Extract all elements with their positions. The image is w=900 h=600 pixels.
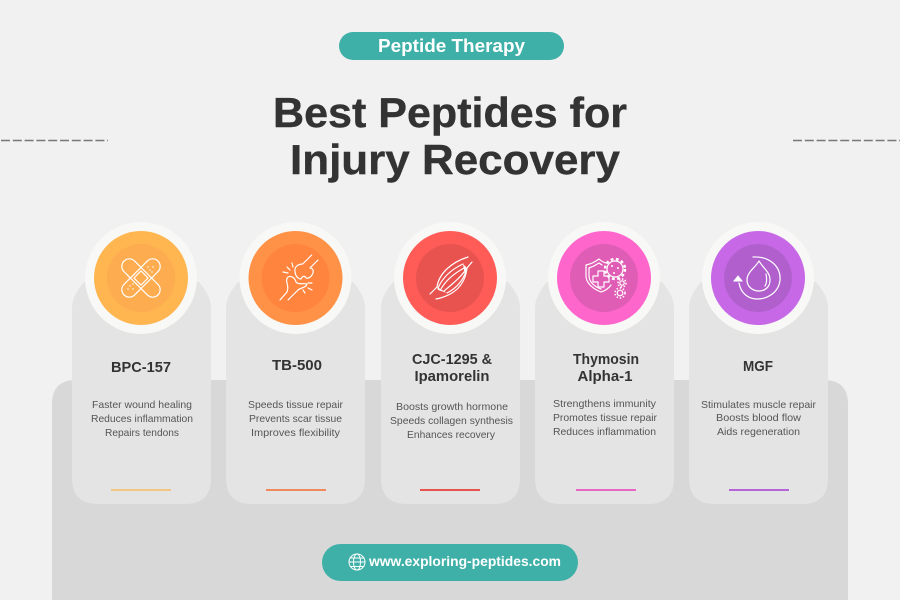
benefits: TB-500: Improves flexibility	[251, 427, 341, 439]
heading: CJC-1295 & Ipamorelin	[412, 351, 492, 385]
header pill: Peptide Therapy	[339, 32, 564, 60]
heading: CJC-1295 & Ipamorelin: CJC-1295 &	[412, 351, 492, 368]
heading: Thymosin Alpha-1	[573, 351, 639, 385]
benefits: TB-500: Speeds tissue repair	[248, 399, 343, 411]
benefits: Thymosin Alpha-1: Strengthens immunity	[553, 398, 657, 410]
benefits: CJC-1295 & Ipamorelin: Boosts growth hormone	[396, 401, 508, 413]
benefits: BPC-157	[91, 399, 193, 439]
header pill: Peptide Therapy: Peptide Therapy	[378, 36, 525, 56]
benefits: BPC-157: Repairs tendons	[105, 427, 179, 439]
panel: MGF	[689, 222, 828, 504]
panel: TB-500	[226, 222, 365, 504]
icon: globe	[349, 554, 365, 570]
footer pill: website: www.exploring-peptides.com	[368, 553, 561, 569]
panel: CJC-1295 & Ipamorelin	[381, 222, 520, 504]
panel: Thymosin Alpha-1	[535, 222, 674, 504]
heading: MGF: MGF	[743, 358, 773, 375]
heading: CJC-1295 & Ipamorelin: Ipamorelin	[414, 368, 490, 385]
benefits: MGF: Boosts blood flow	[716, 412, 801, 424]
icon: muscle	[394, 222, 506, 334]
title: Best Peptides for	[273, 89, 627, 136]
benefits: Thymosin Alpha-1: Promotes tissue repair	[553, 412, 657, 424]
heading: Thymosin Alpha-1: Alpha-1	[578, 368, 632, 385]
benefits: CJC-1295 & Ipamorelin	[390, 401, 513, 441]
benefits: Thymosin Alpha-1: Reduces inflammation	[553, 426, 656, 438]
benefits: Thymosin Alpha-1	[553, 398, 657, 438]
benefits: BPC-157: Reduces inflammation	[91, 413, 193, 425]
footer pill: website	[322, 544, 578, 581]
icon: bandage	[85, 222, 197, 334]
panel: BPC-157	[72, 222, 211, 504]
heading: BPC-157: BPC-157	[111, 359, 171, 376]
icon: immunity shield	[548, 222, 660, 334]
icon: blood drop cycle	[702, 222, 814, 334]
heading: Thymosin Alpha-1: Thymosin	[573, 351, 639, 368]
heading: TB-500: TB-500	[272, 357, 322, 374]
icon: joint	[240, 222, 352, 334]
benefits: TB-500	[248, 399, 343, 439]
lower background panel	[52, 380, 848, 600]
benefits: MGF: Aids regeneration	[717, 426, 800, 438]
benefits: MGF	[701, 399, 816, 438]
benefits: TB-500: Prevents scar tissue	[249, 413, 342, 425]
title: Injury Recovery	[290, 136, 621, 183]
benefits: BPC-157: Faster wound healing	[92, 399, 192, 411]
title	[273, 89, 627, 183]
benefits: CJC-1295 & Ipamorelin: Speeds collagen synthesis	[390, 415, 513, 427]
benefits: MGF: Stimulates muscle repair	[701, 399, 816, 411]
benefits: CJC-1295 & Ipamorelin: Enhances recovery	[407, 429, 496, 441]
